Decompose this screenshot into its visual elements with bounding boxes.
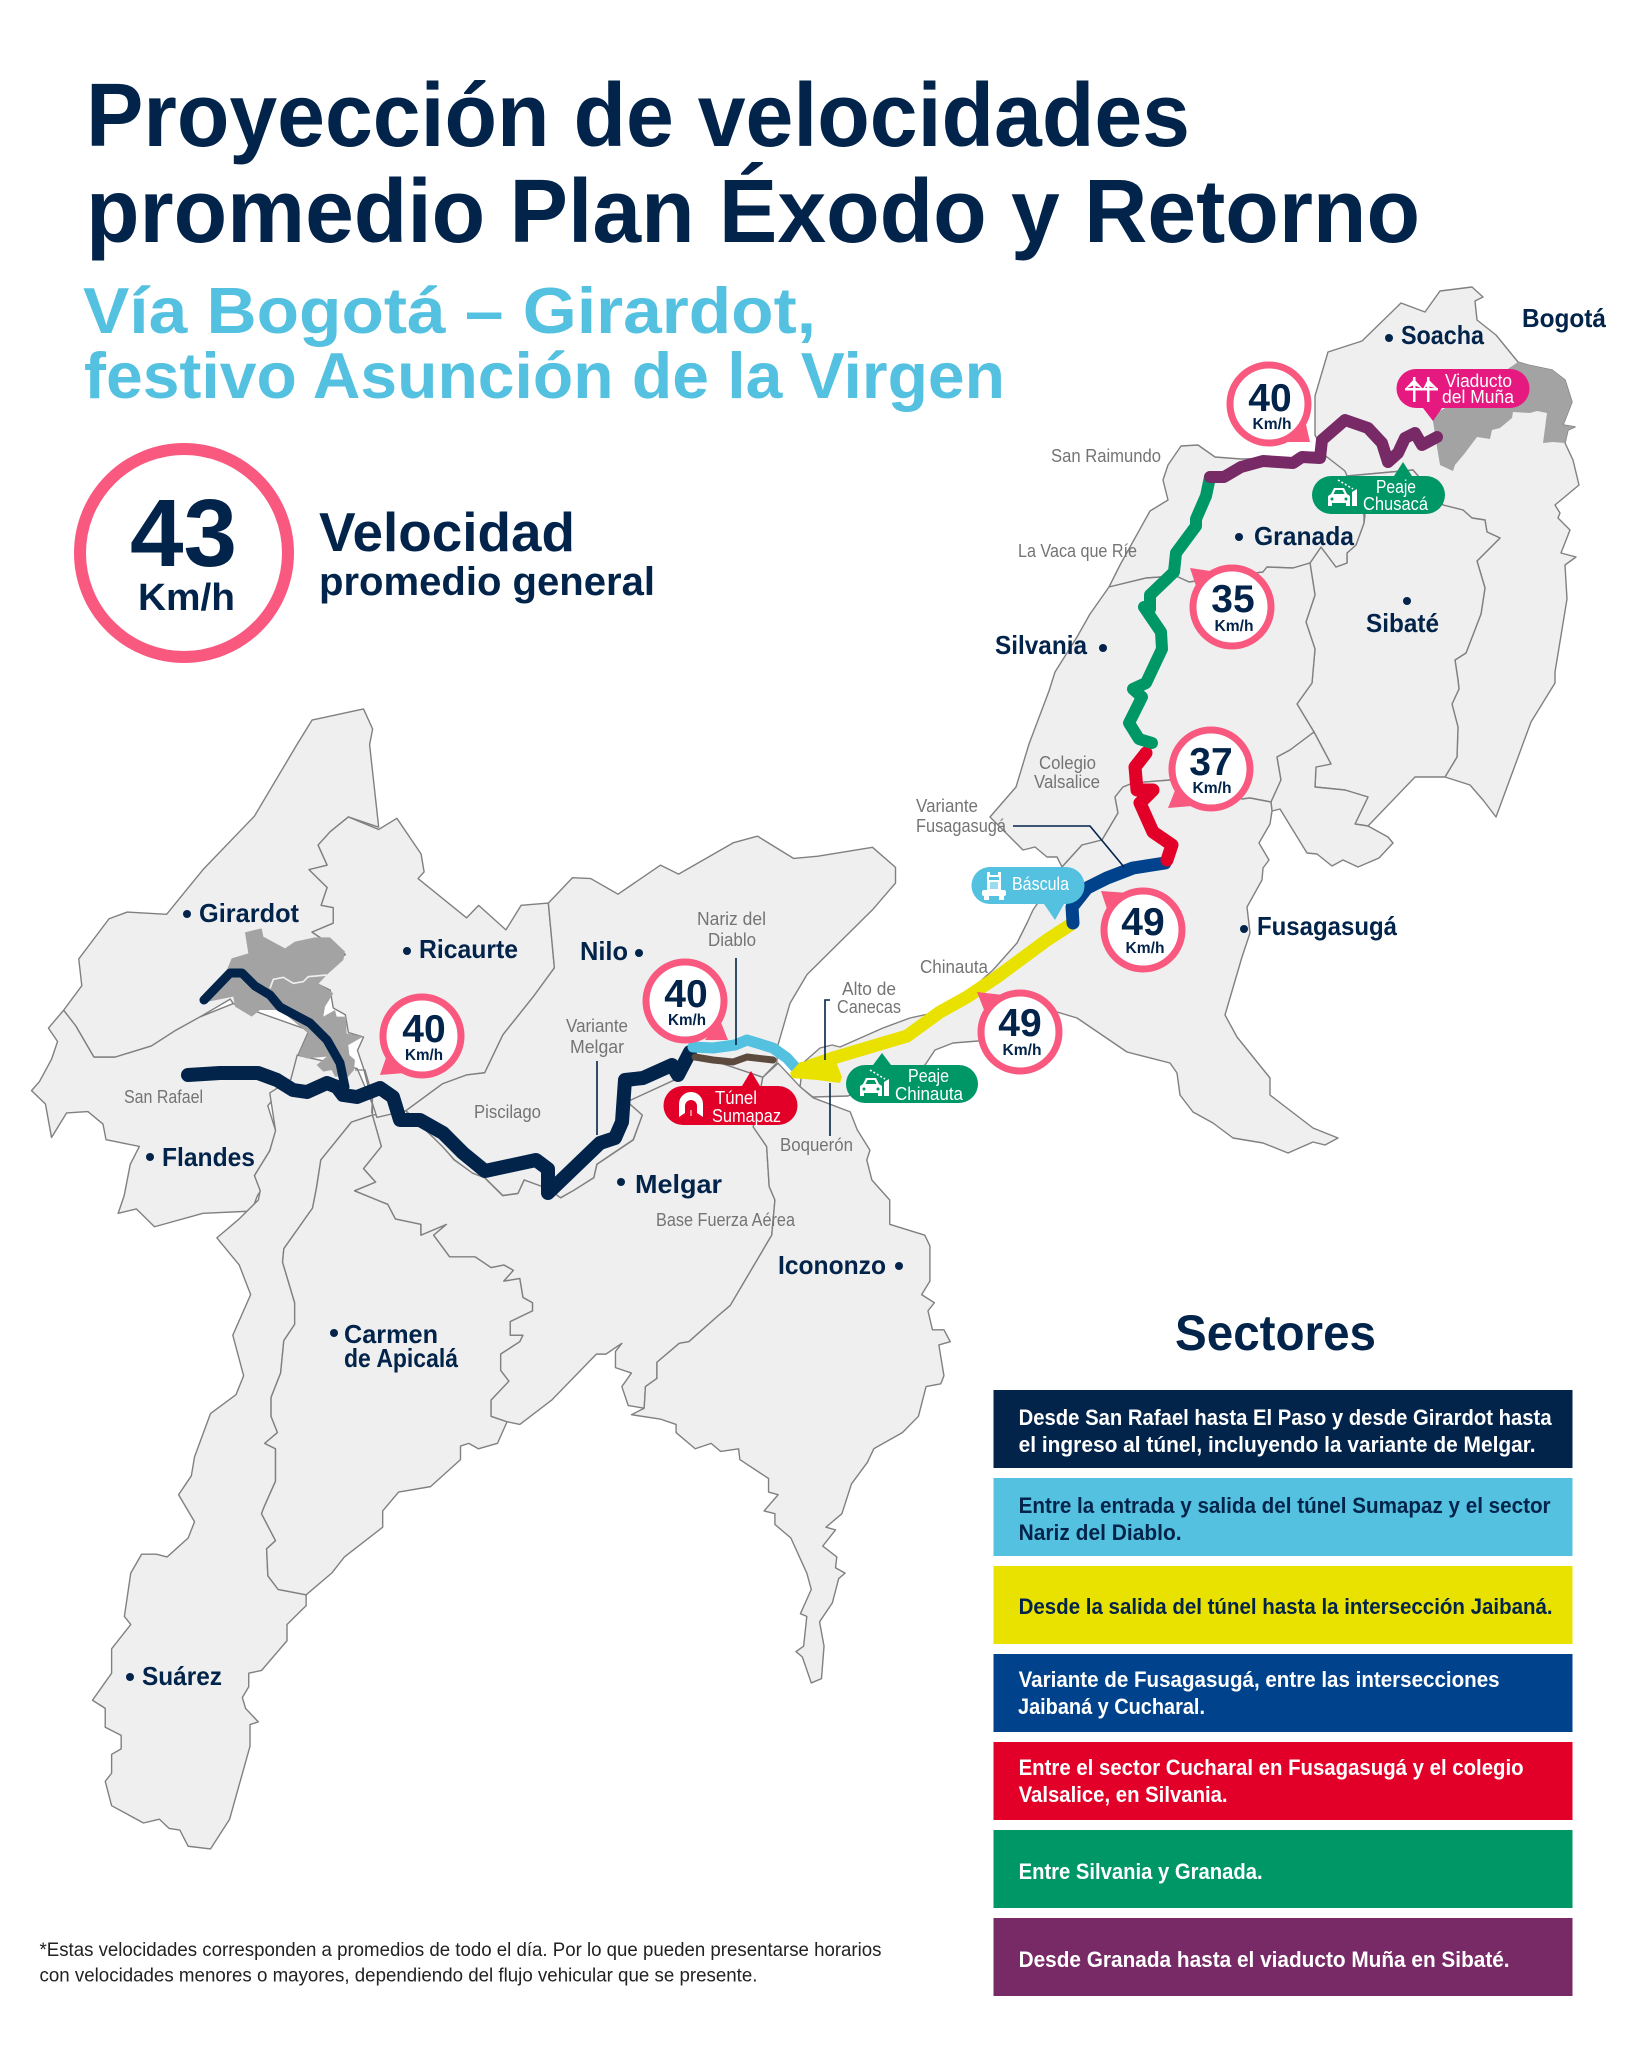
town labels: Sibaté [1366,608,1439,638]
legend: sector 3 [994,1566,1572,1644]
route: yellow sector [790,925,1070,1083]
town labels: Flandes [162,1142,255,1172]
region: Silvania [990,563,1315,867]
town labels: Icononzo [778,1250,886,1280]
town labels: Soacha [1401,320,1484,350]
icon: truck [982,872,1006,900]
callout: Viaducto del Muña [1396,369,1530,421]
town labels: Carmen [344,1319,438,1349]
legend: sector 4 [994,1654,1572,1732]
route: Nariz del Diablo (cyan) [693,1040,795,1067]
legend: sector 5: Valsalice, en Silvania. [1019,1782,1228,1807]
place labels: Melgar [570,1037,624,1057]
place labels: San Rafael [124,1087,203,1107]
region: Sibaté [1297,470,1500,826]
place labels: Base Fuerza Aérea [656,1210,796,1230]
general speed caption: promedio general [319,560,655,604]
legend: sector 6 [994,1830,1572,1908]
town labels: Fusagasugá [1257,911,1397,941]
speed bubble: 40 Girardot: Km/h [405,1047,443,1064]
place labels: Diablo [708,930,756,950]
callout: Peaje Chusacá: Chusacá [1363,494,1429,514]
callout: Peaje Chinauta: Chinauta [895,1084,964,1104]
speed bubble: 35: Km/h [1214,618,1254,635]
callout: Báscula: Báscula [1012,874,1070,894]
route: San Rafael to tunnel (navy) [188,1052,690,1193]
callout: Peaje Chusacá: Peaje [1376,477,1416,497]
title: promedio Plan Éxodo y Retorno [86,161,1420,262]
icon: toll car [860,1070,889,1096]
icon: toll car [1328,480,1357,506]
callout: Túnel Sumapaz: Túnel [715,1088,757,1108]
speed bubble: 49 Chinauta [977,992,1059,1071]
place labels: La Vaca que Ríe [1018,541,1137,561]
place labels: Alto de [842,979,896,999]
footnote: *Estas velocidades corresponden a promedios de todo el día. Por lo que pueden presentarse horarios [40,1939,882,1961]
general speed badge: 43 [130,480,237,587]
leader lines [597,826,1124,1136]
callout: Túnel Sumapaz: Sumapaz [712,1106,781,1126]
place labels: Colegio [1039,753,1096,773]
region: Soacha and east [1315,287,1579,817]
map: urban area Bogotá in grey [1432,362,1575,471]
icon: tunnel [679,1092,703,1117]
town labels: de Apicalá [344,1343,458,1373]
title [86,66,1420,262]
legend: sector 2: Nariz del Diablo. [1019,1520,1182,1545]
legend: sector 2: Entre la entrada y salida del túnel Sumapaz y el sector [1019,1493,1551,1518]
route: Variante Fusagasugá (blue) [1072,863,1165,923]
speed bubble: 35 [1190,568,1271,646]
route: Girardot branch [204,973,345,1087]
place labels: Fusagasugá [916,816,1007,836]
speed bubble: 35: 35 [1211,578,1255,621]
heading: Sectores: Sectores [1175,1305,1376,1361]
place labels: Nariz del [697,909,766,929]
speed bubble: 49 Variante: 49 [1121,901,1165,944]
callout: Túnel Sumapaz [664,1071,798,1126]
legend: sector 5: Entre el sector Cucharal en Fusagasugá y el colegio [1019,1755,1524,1780]
route: tunnel tube (brown) [695,1057,773,1062]
speed bubble: 40 Muña: 40 [1248,377,1292,420]
legend: sector 5 [994,1742,1572,1820]
footnote [40,1939,882,1986]
region: Icononzo [631,1063,950,1683]
legend: sector 1: el ingreso al túnel, incluyendo la variante de Melgar. [1019,1432,1536,1457]
place labels: Piscilago [474,1102,541,1122]
speed bubble: 37: Km/h [1192,780,1232,797]
general speed caption [319,501,655,604]
footnote: con velocidades menores o mayores, dependiendo del flujo vehicular que se presente. [40,1964,758,1986]
route: purple sector [1210,420,1437,477]
speed bubble: 40 Nilo: 40 [664,973,708,1016]
legend: sector 1 [994,1390,1572,1468]
town labels: Nilo [580,936,628,966]
region: Fusagasugá [800,780,1338,1153]
callout: Viaducto del Muña: Viaducto [1445,371,1512,391]
legend: sector 7 [994,1918,1572,1996]
speed bubble: 40 Nilo [646,962,728,1040]
speed bubble: 40 Girardot: 40 [402,1008,446,1051]
town labels [126,303,1607,1691]
subtitle: Vía Bogotá – Girardot, [83,274,816,347]
place labels: Boquerón [780,1135,853,1155]
speed bubble: 40 Nilo: Km/h [668,1012,706,1029]
region: Flandes [32,1004,309,1227]
speed bubble: 40 Muña [1230,365,1310,443]
region: Suárez [92,1055,372,1849]
general speed badge [80,449,288,657]
callout: Peaje Chinauta: Peaje [908,1066,949,1086]
town labels: Suárez [142,1661,222,1691]
route: red sector [1135,753,1172,860]
legend: sector 6: Entre Silvania y Granada. [1019,1859,1263,1884]
town labels: Granada [1254,521,1354,551]
subtitle [83,274,1005,412]
legend: sector 4: Jaibaná y Cucharal. [1018,1694,1205,1719]
subtitle: festivo Asunción de la Virgen [84,339,1005,412]
region: Granada [1109,445,1364,587]
speed bubble: 49 Variante [1101,891,1182,969]
general speed badge: Km/h [138,577,235,619]
route: green sector [1129,477,1210,743]
region: Ricaurte [309,817,554,1117]
region: Carmen de Apicalá [261,1115,533,1595]
speed bubble: 49 Chinauta: 49 [998,1002,1042,1045]
place labels: Valsalice [1034,772,1100,792]
region: Fusagasugá tail [1271,732,1393,867]
region: Melgar [355,1053,775,1424]
town labels: Girardot [199,898,299,928]
region: Girardot [64,709,379,1057]
place labels: Variante [566,1016,628,1036]
speed bubble: 37 [1168,730,1250,808]
place labels: San Raimundo [1051,446,1161,466]
speed bubble: 37: 37 [1189,741,1233,784]
title: Proyección de velocidades [86,66,1190,166]
town labels: Bogotá [1522,303,1607,333]
town labels: Ricaurte [419,934,518,964]
icon: bridge [1405,377,1438,402]
speed bubble: 40 Girardot [380,997,461,1075]
legend: sector 2 [994,1478,1572,1556]
speed bubble: 49 Chinauta: Km/h [1002,1042,1042,1059]
general speed caption: Velocidad [319,501,575,563]
place labels: Canecas [837,997,901,1017]
map: urban area Girardot in grey [208,928,373,1113]
speed bubble: 40 Muña: Km/h [1252,416,1292,433]
speed bubble: 49 Variante: Km/h [1126,940,1164,957]
place labels [124,446,1161,1230]
region: Nilo [406,836,896,1198]
legend: sector 7: Desde Granada hasta el viaducto Muña en Sibaté. [1019,1947,1510,1972]
legend: sector 4: Variante de Fusagasugá, entre las intersecciones [1019,1667,1500,1692]
map: municipalities [32,287,1579,1849]
callout: Báscula [972,867,1084,920]
callout: Viaducto del Muña: del Muña [1442,387,1515,407]
place labels: Variante [916,796,978,816]
callout: Peaje Chusacá [1312,462,1445,514]
place labels: Chinauta [920,957,989,977]
town labels: Silvania [995,630,1087,660]
legend: sector 1: Desde San Rafael hasta El Paso y desde Girardot hasta [1019,1405,1552,1430]
callout: Peaje Chinauta [846,1053,978,1104]
legend: sector 3: Desde la salida del túnel hasta la intersección Jaibaná. [1019,1594,1553,1619]
town labels: Melgar [635,1169,722,1199]
